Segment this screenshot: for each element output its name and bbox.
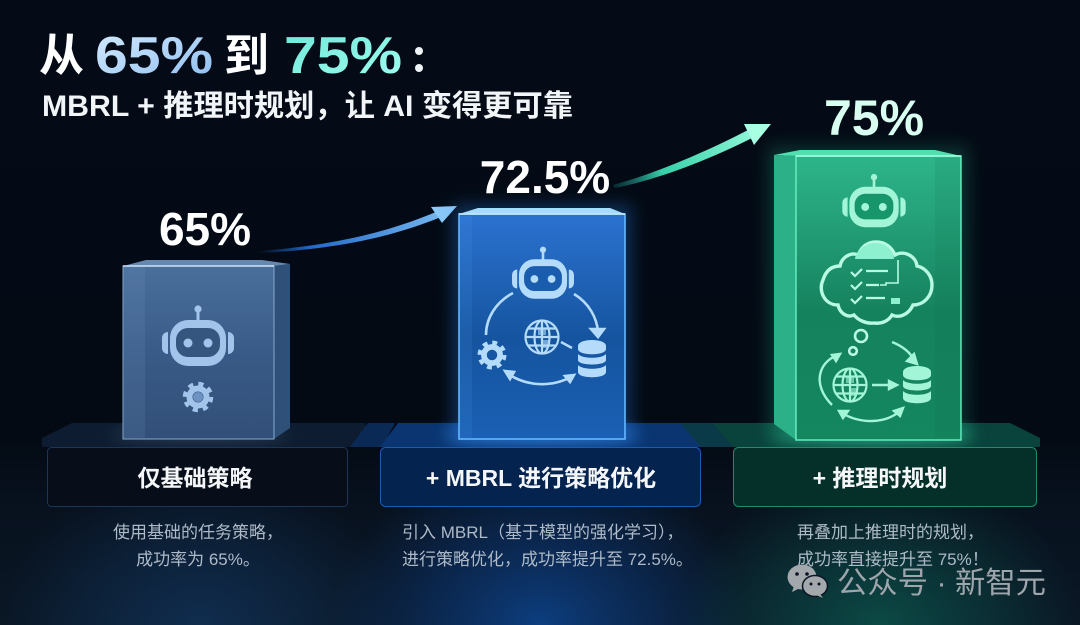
subtitle: MBRL + 推理时规划，让 AI 变得更可靠	[42, 90, 573, 123]
description: basic	[113, 522, 283, 569]
label: basic	[48, 448, 348, 506]
cycle arrows	[486, 293, 604, 384]
label: MBRL: + MBRL 进行策略优化	[426, 465, 656, 491]
arrow: 72.5% to 75%	[613, 124, 771, 188]
value: 72.5%: 72.5%	[480, 151, 610, 203]
arrow: 65% to 72.5%	[258, 206, 457, 253]
watermark: 公众号 · 新智元	[837, 567, 1046, 600]
cycle arrows	[820, 342, 917, 421]
description: MBRL: 引入 MBRL（基于模型的强化学习），	[402, 523, 683, 542]
title: 65%	[95, 27, 213, 85]
label: planning	[734, 448, 1036, 506]
icon: database	[578, 340, 606, 377]
thought bubbles	[849, 330, 867, 355]
description: MBRL: 进行策略优化，成功率提升至 72.5%。	[402, 550, 693, 569]
icon: robot	[162, 305, 234, 366]
description: planning: 再叠加上推理时的规划，	[797, 523, 984, 542]
stage platforms	[42, 423, 1040, 447]
icon: gear	[480, 343, 504, 367]
description: planning	[797, 523, 989, 569]
box 2: MBRL	[453, 205, 631, 443]
title: 75%	[284, 27, 402, 85]
description: basic: 使用基础的任务策略，	[113, 522, 283, 542]
description: planning: 成功率直接提升至 75%！	[797, 550, 989, 569]
icon: robot	[842, 174, 906, 227]
value: 65%: 65%	[159, 203, 251, 255]
box 1: basic	[123, 260, 290, 439]
icon: planning cloud	[821, 242, 932, 323]
icon: globe	[526, 320, 558, 354]
icon: globe	[834, 368, 866, 402]
label: MBRL	[380, 448, 700, 506]
description: basic: 成功率为 65%。	[136, 550, 260, 569]
value: 75%: 75%	[824, 90, 924, 146]
title	[39, 27, 423, 85]
icon: robot	[512, 247, 574, 299]
label: basic: 仅基础策略	[138, 465, 252, 491]
title: 从	[39, 30, 84, 81]
icon: database	[903, 366, 931, 403]
icon: gear	[185, 384, 211, 410]
box 3: planning	[768, 146, 968, 444]
label: planning: + 推理时规划	[813, 465, 947, 491]
title: 到	[224, 30, 269, 81]
description: MBRL	[402, 523, 693, 569]
